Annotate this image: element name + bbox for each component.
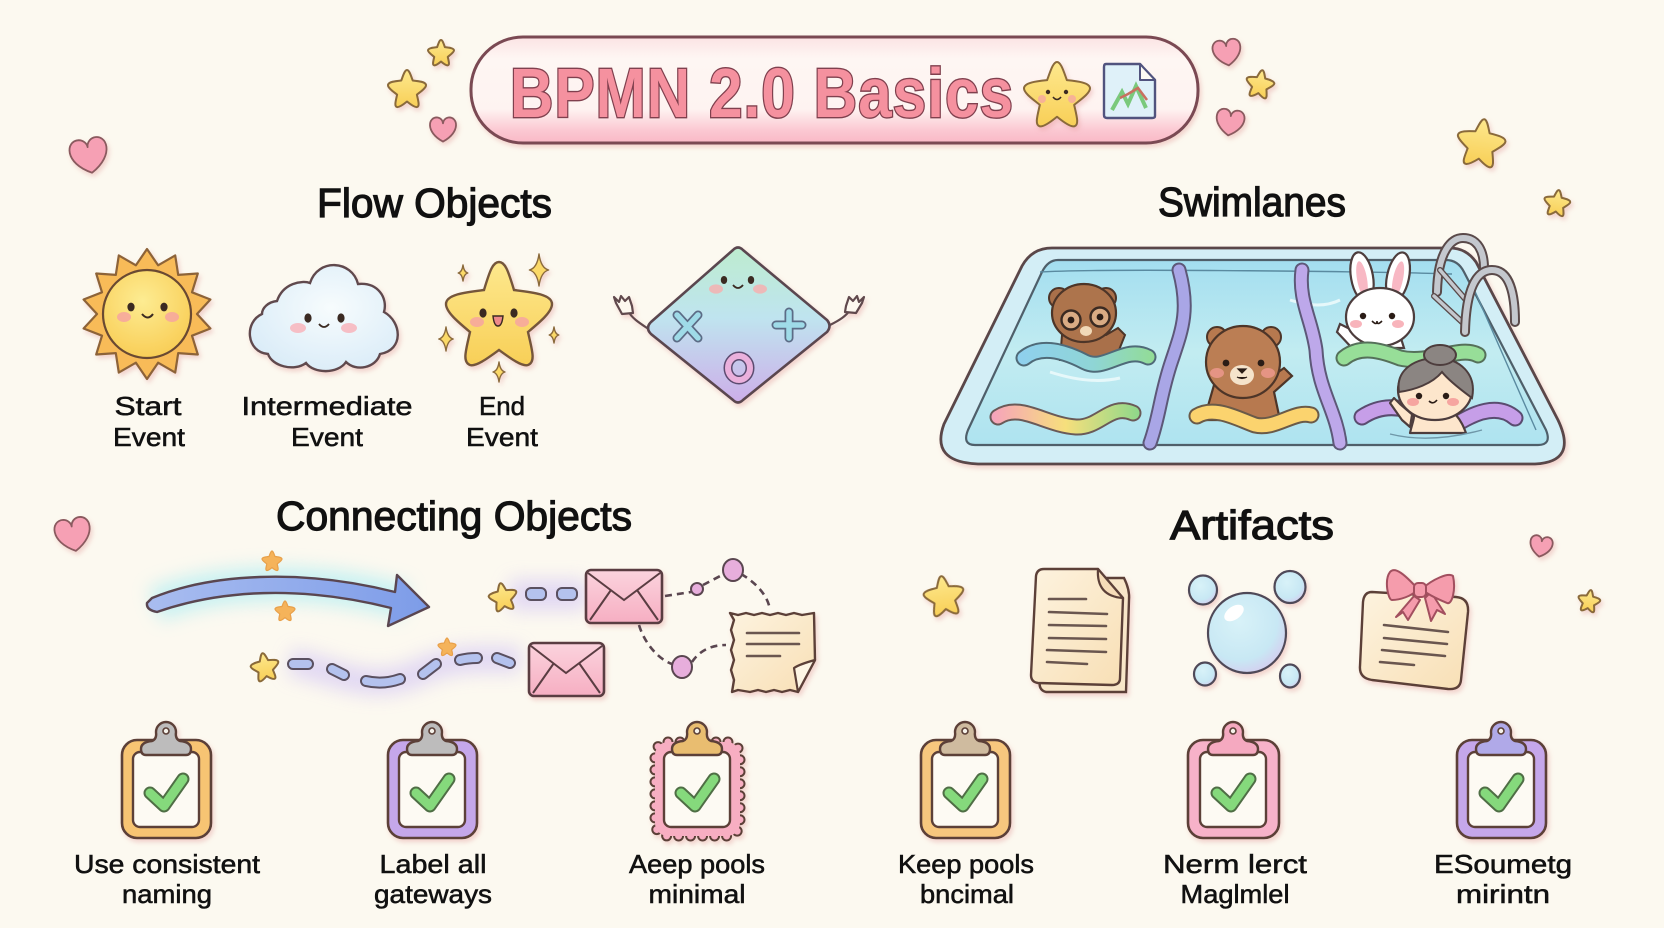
message flow one bbox=[487, 570, 662, 623]
lane divider left bbox=[1150, 270, 1184, 443]
decoration: stars and hearts around title bbox=[53, 38, 1602, 618]
pool rim bbox=[941, 248, 1564, 464]
label: Intermediate Event: Event bbox=[291, 422, 364, 452]
tip: Label all gateways bbox=[374, 722, 492, 909]
swimming pool illustration bbox=[941, 238, 1564, 464]
icon: start event sun bbox=[84, 249, 210, 379]
gateway symbol: plus bbox=[776, 312, 802, 338]
character: girl swimmer bbox=[1390, 345, 1482, 438]
heading: Flow Objects: Flow Objects bbox=[317, 180, 552, 226]
tip: Use consistent naming: naming bbox=[122, 879, 212, 909]
bow ribbon bbox=[1387, 570, 1454, 621]
icon: document with chart in title bbox=[1104, 64, 1155, 118]
tip: Keep pools bncimal: Keep pools bbox=[898, 849, 1034, 879]
label: Intermediate Event: Intermediate bbox=[242, 391, 412, 421]
tip: Keep pools bncimal bbox=[898, 722, 1034, 909]
label: Start Event: Event bbox=[113, 422, 186, 452]
tip: Aeep pools minimal bbox=[629, 722, 765, 909]
tip: ESoumetg mirintn bbox=[1434, 722, 1572, 909]
tip: Use consistent naming bbox=[74, 722, 261, 909]
label: End Event: End bbox=[479, 391, 525, 421]
icon: note with bow bbox=[1360, 570, 1468, 689]
tip: Nerm lerct Maglmlel: Nerm lerct bbox=[1163, 849, 1308, 879]
character: bunny bbox=[1337, 250, 1414, 348]
annotation note bbox=[730, 613, 815, 692]
gateway symbol: X bbox=[677, 315, 698, 338]
tip: Aeep pools minimal: Aeep pools bbox=[629, 849, 765, 879]
icon: end event star bbox=[439, 254, 559, 382]
tip: Label all gateways: gateways bbox=[374, 879, 492, 909]
clipboard bbox=[388, 722, 477, 838]
tip: Use consistent naming: Use consistent bbox=[74, 849, 261, 879]
icon: gateway diamond bbox=[614, 248, 864, 402]
clipboard bbox=[1188, 722, 1279, 838]
icon: smiling star in title bbox=[1024, 62, 1090, 126]
tip: Nerm lerct Maglmlel: Maglmlel bbox=[1180, 879, 1290, 909]
icon: intermediate event cloud bbox=[250, 265, 398, 371]
gateway symbol: circle bbox=[728, 356, 750, 380]
lane divider right bbox=[1301, 270, 1340, 443]
tip: Nerm lerct Maglmlel bbox=[1163, 722, 1308, 909]
label: Start Event bbox=[113, 391, 186, 452]
heading: Connecting Objects: Connecting Objects bbox=[276, 493, 632, 539]
title banner bbox=[471, 37, 1198, 143]
pool noodles bbox=[998, 350, 1515, 427]
arrow sparkle stars bbox=[262, 551, 295, 621]
clipboard bbox=[1457, 722, 1546, 838]
heading: Swimlanes: Swimlanes bbox=[1158, 179, 1346, 225]
label: Intermediate Event bbox=[242, 391, 412, 452]
envelope bbox=[586, 570, 662, 623]
sequence flow arrow bbox=[147, 551, 429, 626]
envelope bbox=[529, 643, 604, 696]
tip: Keep pools bncimal: bncimal bbox=[920, 879, 1014, 909]
icon: data object document bbox=[1031, 569, 1129, 692]
heading: Artifacts: Artifacts bbox=[1170, 502, 1334, 548]
clipboard bbox=[122, 722, 211, 838]
pool water bbox=[966, 260, 1548, 445]
pool ladder bbox=[1434, 238, 1515, 332]
tip: Aeep pools minimal: minimal bbox=[648, 879, 746, 909]
label: Start Event: Start bbox=[114, 391, 182, 421]
character: bear with glasses bbox=[1049, 284, 1125, 360]
gateway arms and hands bbox=[614, 296, 864, 328]
clipboard bbox=[655, 722, 740, 836]
icon: group bubbles bbox=[1189, 571, 1306, 688]
tip: ESoumetg mirintn: ESoumetg bbox=[1434, 849, 1572, 879]
message flow two bbox=[249, 638, 604, 696]
clipboard bbox=[921, 722, 1010, 838]
label: End Event: Event bbox=[466, 422, 539, 452]
tip: Label all gateways: Label all bbox=[380, 849, 486, 879]
association dashed connectors bbox=[639, 559, 770, 678]
tip: ESoumetg mirintn: mirintn bbox=[1456, 879, 1550, 909]
title text: BPMN 2.0 Basics bbox=[510, 54, 1013, 132]
label: End Event bbox=[466, 391, 539, 452]
character: bear bbox=[1204, 326, 1292, 420]
